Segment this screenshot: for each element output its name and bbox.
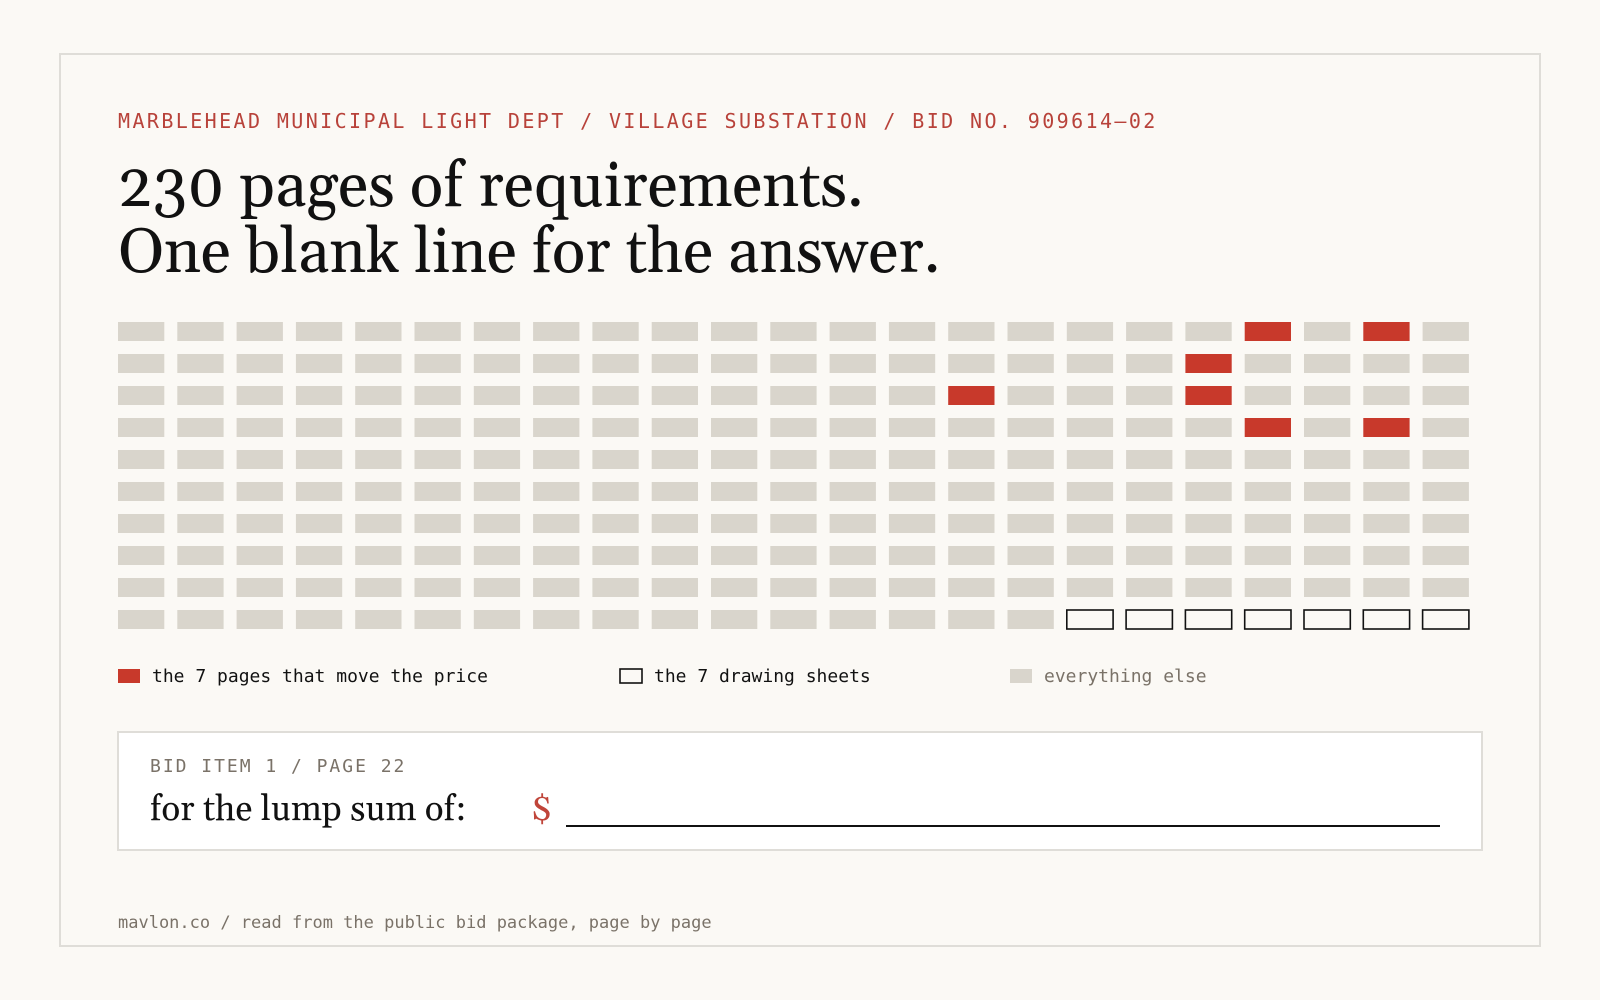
form label: BID ITEM 1 / PAGE 22 [150, 756, 406, 777]
blank answer line [566, 825, 1440, 827]
legend swatch: outline [619, 668, 643, 684]
title: 230 pages of requirements. [118, 149, 864, 228]
form prompt: for the lump sum of: [150, 788, 466, 832]
legend label: everything else: everything else [1044, 666, 1207, 687]
eyebrow: bid reference: MARBLEHEAD MUNICIPAL LIGHT DEPT / VILLAGE SUBSTATION / BID NO. 909614–02 [118, 109, 1158, 133]
dollar sign: $ [531, 788, 552, 832]
legend label: drawing sheets: the 7 drawing sheets [654, 666, 871, 687]
title [118, 149, 940, 294]
legend label: pages that move the price: the 7 pages that move the price [152, 666, 488, 687]
title: One blank line for the answer. [118, 215, 940, 294]
legend swatch: grey [1010, 669, 1032, 683]
panel: bid item form [117, 731, 1483, 851]
legend swatch: red [118, 669, 140, 683]
legend [118, 666, 1207, 687]
footer source note: mavlon.co / read from the public bid package, page by page [118, 913, 712, 933]
